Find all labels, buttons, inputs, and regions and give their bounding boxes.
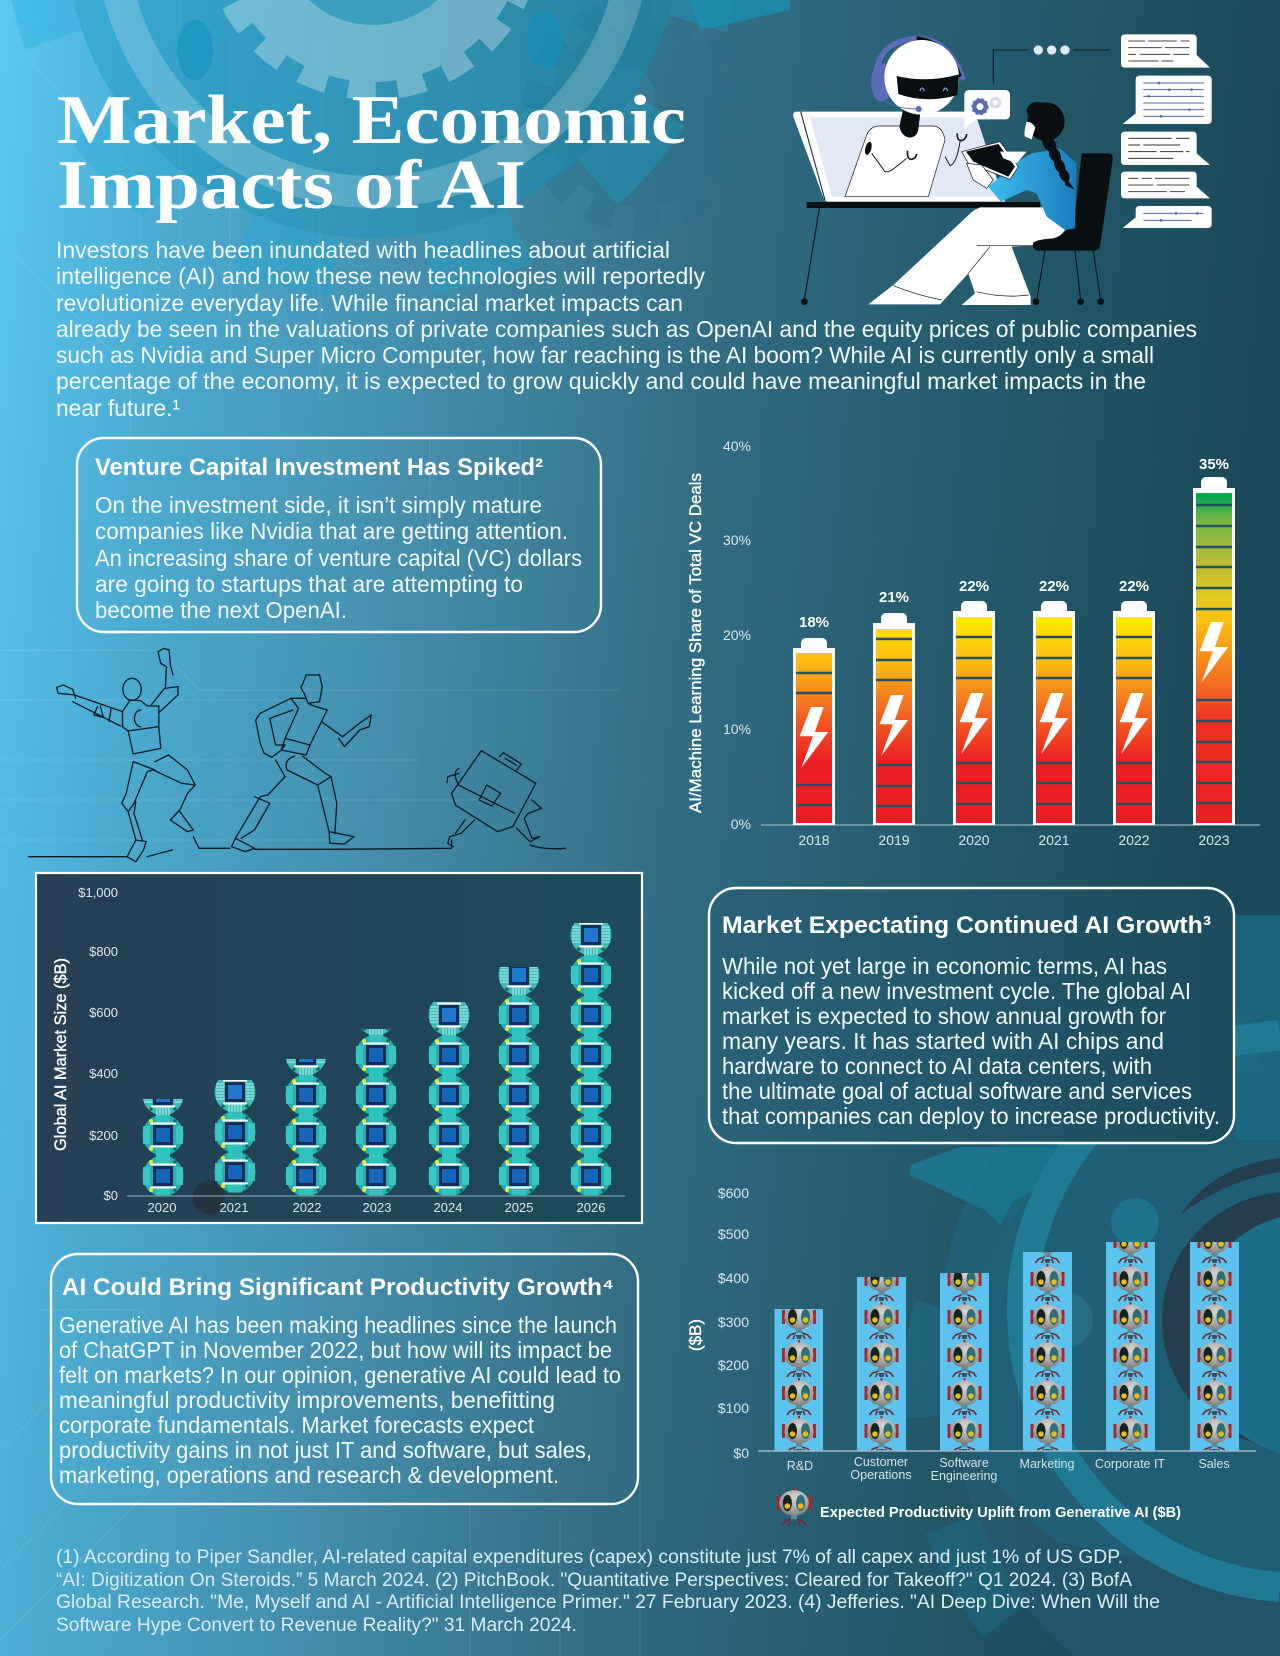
panel: productivity growth	[51, 1254, 638, 1504]
text: market growth body	[722, 953, 1220, 1129]
chip column 2021	[214, 1072, 256, 1192]
bar marketing	[1023, 1252, 1072, 1450]
y axis labels: $1,000	[78, 885, 118, 900]
bar R&D	[774, 1302, 823, 1453]
x axis labels: 2024	[434, 1200, 462, 1215]
bar customer operations	[857, 1264, 906, 1453]
x axis labels: Marketing	[1020, 1457, 1074, 1471]
battery 2023: 35%	[1199, 456, 1229, 473]
chair	[1033, 153, 1113, 305]
text: market growth body: that companies can deploy to increase productivity.	[722, 1103, 1220, 1129]
chart: productivity uplift	[686, 1185, 1256, 1525]
battery 2020	[953, 578, 995, 848]
battery 2022	[1113, 578, 1155, 848]
text: venture capital body: are going to startups that are attempting to	[95, 571, 523, 597]
footnotes	[56, 1547, 1160, 1636]
y axis labels: 0%	[731, 816, 751, 832]
title: Market, Economic	[57, 82, 686, 159]
text: venture capital body: become the next OpenAI.	[95, 597, 347, 623]
text: productivity body: productivity gains in not just IT and software, but sales,	[59, 1437, 592, 1463]
chip column 2022	[286, 1059, 326, 1196]
battery 2018: 2018	[798, 832, 830, 848]
x axis labels: Operations	[850, 1468, 912, 1482]
battery 2020: 22%	[959, 578, 989, 595]
footnotes: (1) According to Piper Sandler, AI-related capital expenditures (capex) constitute just 7% of all capex and just 1% of US GDP.	[56, 1547, 1123, 1568]
robot	[845, 38, 967, 197]
desk	[801, 202, 1040, 305]
y axis title: ($B)	[686, 1319, 705, 1351]
text: venture capital body: An increasing share of venture capital (VC) dollars	[95, 545, 582, 571]
text: productivity body: of ChatGPT in November 2022, but how will its impact be	[59, 1337, 612, 1363]
x axis labels: R&D	[787, 1459, 813, 1473]
briefcase	[447, 751, 542, 847]
text: market growth body: kicked off a new investment cycle. The global AI	[722, 978, 1191, 1004]
battery 2019: 2019	[878, 832, 910, 848]
connector with dots	[993, 45, 1110, 83]
bar corporate IT	[1106, 1226, 1155, 1453]
battery 2021	[1033, 578, 1075, 848]
chip column 2020	[142, 1099, 184, 1196]
text: productivity body	[59, 1312, 621, 1488]
text: market growth body: many years. It has started with AI chips and	[722, 1028, 1164, 1054]
text: venture capital body	[95, 492, 582, 623]
robot: running	[232, 675, 371, 852]
robot: dancing	[57, 648, 195, 862]
battery 2022: 2022	[1118, 832, 1150, 848]
heading: productivity: AI Could Bring Significant Productivity Growth⁴	[62, 1274, 614, 1301]
y axis labels	[723, 438, 751, 832]
y axis labels: $400	[718, 1270, 749, 1286]
legend: Expected Productivity Uplift from Generative AI ($B)	[820, 1504, 1181, 1521]
chip column 2023	[356, 1029, 396, 1196]
line art: robots chasing briefcase	[29, 648, 566, 862]
title: Impacts of AI	[57, 147, 526, 224]
y axis labels: $0	[733, 1445, 749, 1461]
x axis labels: 2022	[293, 1200, 321, 1215]
bar sales	[1190, 1226, 1239, 1453]
y axis labels	[78, 885, 118, 1203]
x axis labels: 2026	[577, 1200, 605, 1215]
y axis labels: $500	[718, 1226, 749, 1242]
smudge	[193, 1180, 225, 1214]
y axis labels: $600	[89, 1005, 118, 1020]
battery 2019	[873, 589, 915, 848]
x axis labels: Software	[939, 1456, 989, 1470]
background: circuit traces	[0, 0, 640, 1656]
y axis title: AI/Machine Learning Share of Total VC Deals	[686, 473, 705, 813]
y axis labels: $200	[89, 1128, 118, 1143]
panel: global AI market size chart	[36, 873, 642, 1223]
chart: AI share of VC deals	[686, 438, 1260, 848]
intro text block: revolutionize everyday life. While financial market impacts can	[56, 290, 683, 316]
text: venture capital body: On the investment side, it isn’t simply mature	[95, 492, 542, 518]
y axis labels: 20%	[723, 627, 751, 643]
y axis labels	[718, 1185, 749, 1461]
x axis labels: Customer	[854, 1455, 908, 1469]
intro text block: already be seen in the valuations of private companies such as OpenAI and the equity prices of public companies	[56, 316, 1197, 342]
y axis labels: $400	[89, 1066, 118, 1081]
ground line	[29, 837, 566, 859]
heading: market growth: Market Expectating Continued AI Growth³	[722, 912, 1211, 939]
chip column 2025	[498, 954, 540, 1196]
y axis labels: $800	[89, 944, 118, 959]
text: market growth body: While not yet large in economic terms, AI has	[722, 953, 1167, 979]
background: bottom-right gear	[910, 915, 1280, 1656]
y axis labels: $0	[104, 1188, 118, 1203]
chip column 2026	[570, 914, 612, 1196]
text: productivity body: meaningful productivity improvements, benefitting	[59, 1387, 555, 1413]
chat bubbles	[1121, 34, 1212, 228]
y axis labels: 40%	[723, 438, 751, 454]
battery 2020: 2020	[958, 832, 990, 848]
panel: market expecting growth	[709, 888, 1234, 1143]
x axis labels: 2020	[148, 1200, 176, 1215]
gear speech bubble	[964, 90, 1010, 128]
bar software engineering	[940, 1264, 989, 1453]
text: venture capital body: companies like Nvidia that are getting attention.	[95, 518, 568, 544]
text: market growth body: the ultimate goal of actual software and services	[722, 1078, 1192, 1104]
x axis labels: 2021	[220, 1200, 248, 1215]
battery 2022: 22%	[1119, 578, 1149, 595]
battery 2018	[793, 614, 835, 848]
footnotes: “AI: Digitization On Steroids.” 5 March 2024. (2) PitchBook. "Quantitative Perspectives: Cleared for Takeoff?" Q1 2024. (3) BofA	[56, 1570, 1132, 1591]
intro text block	[56, 237, 1197, 421]
x axis labels: Engineering	[931, 1469, 997, 1483]
intro text block: Investors have been inundated with headlines about artificial	[56, 237, 670, 263]
y axis labels: 10%	[723, 721, 751, 737]
intro text block: intelligence (AI) and how these new technologies will reportedly	[56, 263, 706, 289]
intro text block: such as Nvidia and Super Micro Computer, how far reaching is the AI boom? While AI is currently only a small	[56, 342, 1154, 368]
x axis labels	[787, 1455, 1230, 1483]
x axis labels: Sales	[1198, 1457, 1230, 1471]
x axis labels: Corporate IT	[1095, 1457, 1165, 1471]
text: productivity body: marketing, operations and research & development.	[59, 1462, 559, 1488]
title	[57, 82, 686, 224]
y axis labels: $600	[718, 1185, 749, 1201]
footnotes: Global Research. "Me, Myself and AI - Artificial Intelligence Primer." 27 February 2023. (4) Jefferies. "AI Deep Dive: When Will the	[56, 1592, 1160, 1613]
x axis labels	[148, 1200, 605, 1215]
battery 2019: 21%	[879, 589, 909, 606]
text: market growth body: market is expected to show annual growth for	[722, 1003, 1166, 1029]
text: productivity body: felt on markets? In our opinion, generative AI could lead to	[59, 1362, 621, 1388]
y axis title: Global AI Market Size ($B)	[51, 958, 70, 1151]
text: productivity body: corporate fundamentals. Market forecasts expect	[59, 1412, 535, 1438]
y axis labels: $200	[718, 1357, 749, 1373]
y axis labels: $300	[718, 1314, 749, 1330]
intro text block: near future.¹	[56, 395, 180, 421]
battery 2021: 22%	[1039, 578, 1069, 595]
battery 2021: 2021	[1038, 832, 1070, 848]
intro text block: percentage of the economy, it is expected to grow quickly and could have meaningful market impacts in the	[56, 368, 1146, 394]
chip column 2024	[428, 994, 470, 1196]
y axis labels: 30%	[723, 532, 751, 548]
woman: legs	[868, 207, 1065, 305]
background: top gear	[35, 0, 790, 268]
footnotes: Software Hype Convert to Revenue Reality?" 31 March 2024.	[56, 1615, 577, 1636]
illustration: robot and woman at desk	[793, 34, 1212, 305]
y axis labels: $100	[718, 1400, 749, 1416]
x axis labels: 2023	[363, 1200, 391, 1215]
monitor	[793, 112, 1005, 202]
woman: torso, tablet and hair	[962, 102, 1077, 230]
panel: venture capital	[77, 438, 601, 632]
battery 2018: 18%	[799, 614, 829, 631]
battery 2023: 2023	[1198, 832, 1230, 848]
battery 2023	[1193, 456, 1235, 848]
text: market growth body: hardware to connect to AI data centers, with	[722, 1053, 1152, 1079]
heading: venture capital: Venture Capital Investment Has Spiked²	[95, 454, 543, 481]
text: productivity body: Generative AI has been making headlines since the launch	[59, 1312, 617, 1338]
legend	[777, 1488, 1181, 1525]
x axis labels: 2025	[505, 1200, 533, 1215]
